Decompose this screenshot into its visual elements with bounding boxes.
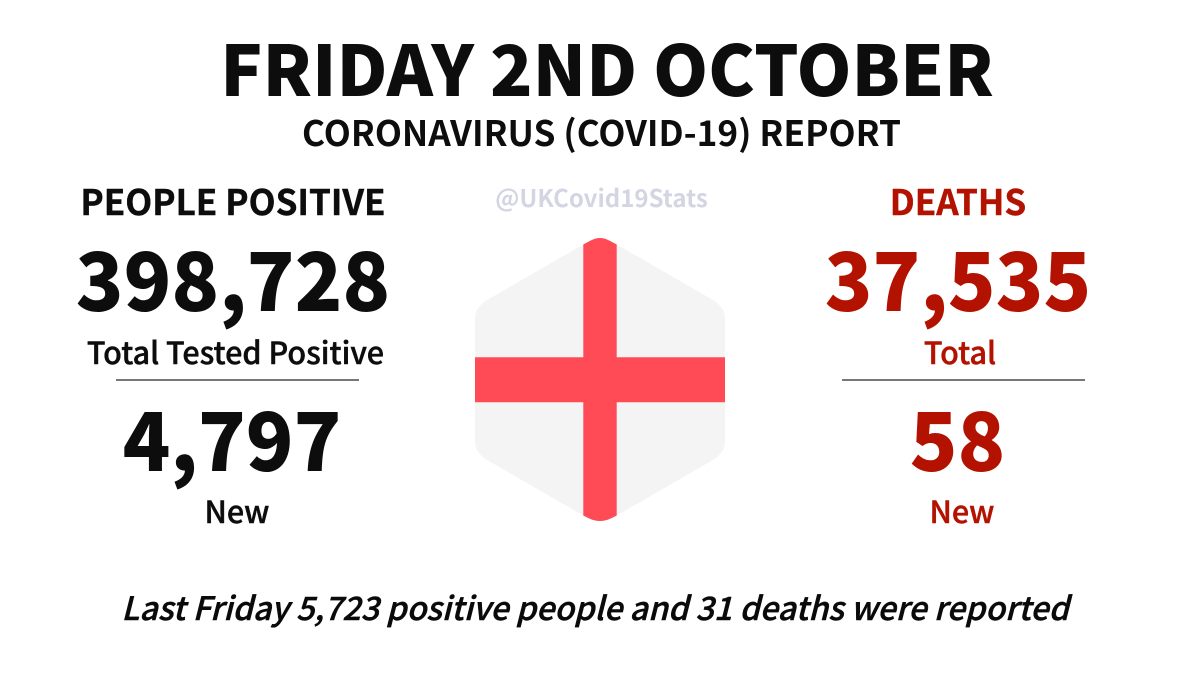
footer comparison note: Last Friday 5,723 positive people and 31 deaths were reported [121,584,1069,630]
new deaths label: New [930,488,994,532]
divider [842,379,1085,381]
new deaths number: 58 [910,377,1005,495]
watermark handle: @UKCovid19Stats [495,179,708,214]
heading: people positive: PEOPLE POSITIVE [80,175,386,226]
new positive label: New [205,488,269,532]
icon: England flag hexagon [475,238,725,521]
total deaths number: 37,535 [825,217,1091,335]
title: FRIDAY 2ND OCTOBER [220,16,994,117]
new positive number: 4,797 [123,377,341,495]
heading: deaths: DEATHS [890,175,1026,226]
subtitle: CORONAVIRUS (COVID-19) REPORT [302,106,901,157]
total positive number: 398,728 [76,217,390,335]
divider [116,379,359,381]
total deaths label: Total [924,328,996,372]
panel: people positive [76,175,390,532]
panel: deaths [825,175,1091,532]
total positive label: Total Tested Positive [87,328,384,372]
